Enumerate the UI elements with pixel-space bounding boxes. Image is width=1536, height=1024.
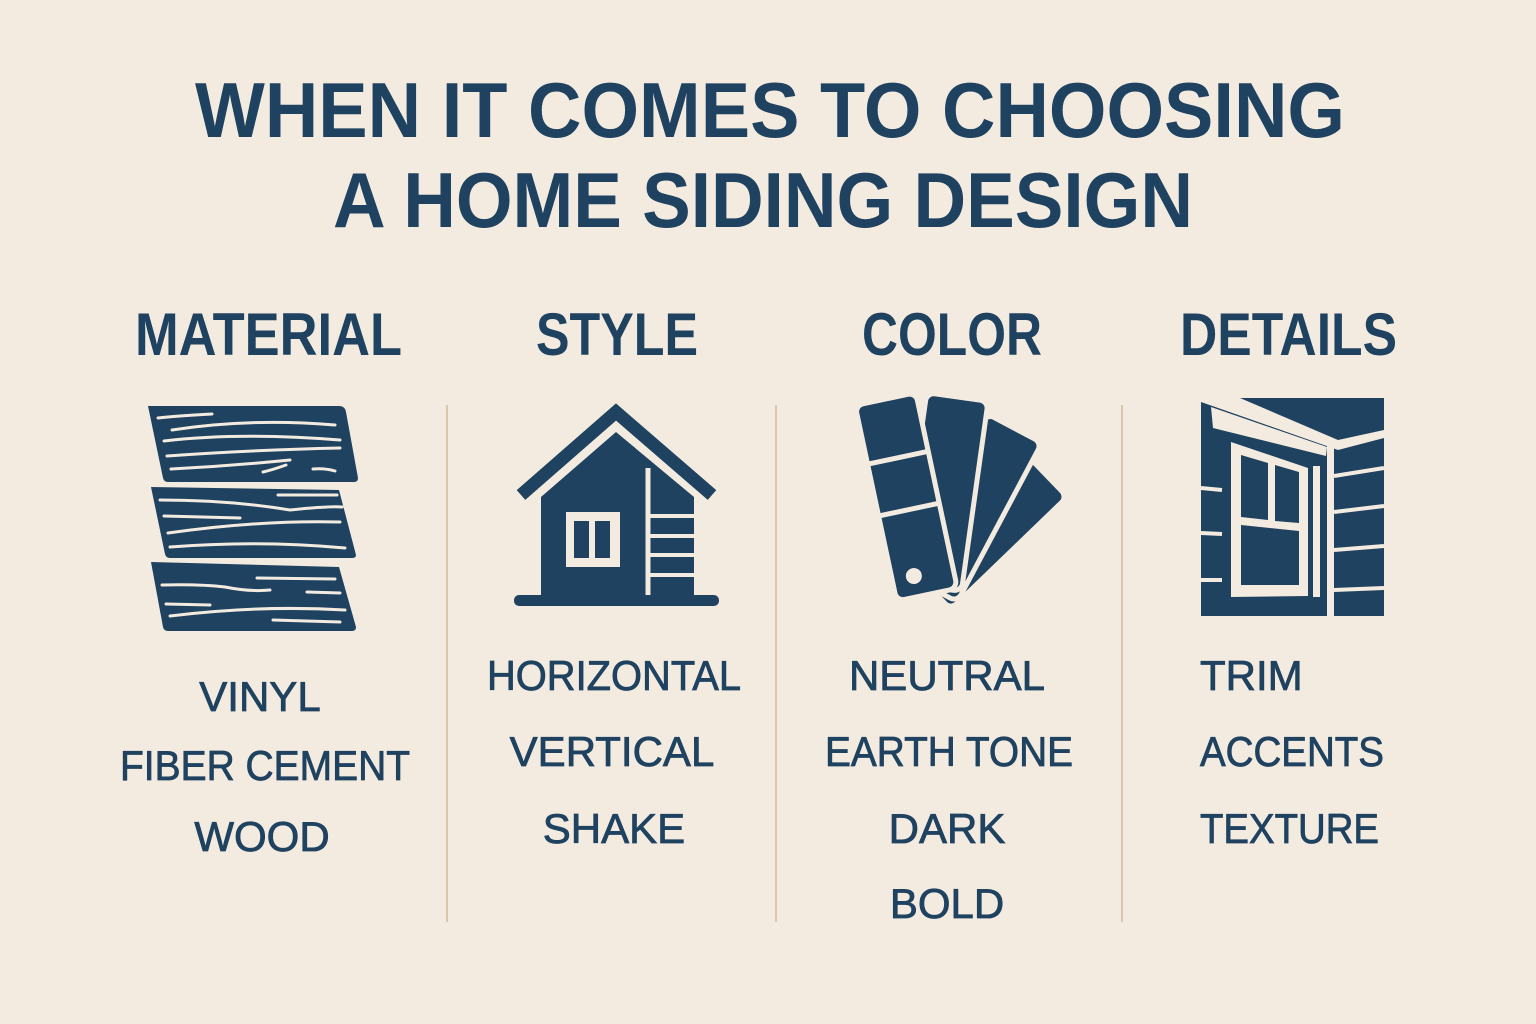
heading: details: DETAILS [1180,301,1397,368]
list: material [120,673,410,860]
heading: color: COLOR [862,301,1042,368]
icon: color swatch fan [855,393,1067,609]
list: material: VINYL [199,673,321,720]
heading: style: STYLE [536,301,698,368]
icon: house [514,412,719,606]
title: WHEN IT COMES TO CHOOSING [195,66,1345,154]
icon: window trim [1201,398,1384,616]
list: material: FIBER CEMENT [120,742,410,789]
list: color: DARK [889,805,1005,852]
list: details: ACCENTS [1200,728,1384,775]
panel: details [1180,301,1397,852]
panel: material [120,301,410,860]
list: style [487,652,741,852]
list: style: SHAKE [543,805,685,852]
list: color: BOLD [890,880,1004,927]
panel: color [825,301,1073,927]
list: style: HORIZONTAL [487,652,741,699]
list: color [825,652,1073,927]
icon: wood planks [148,406,358,631]
heading: material: MATERIAL [135,301,402,368]
list: style: VERTICAL [510,728,714,775]
list: material: WOOD [194,813,330,860]
title [195,66,1345,244]
list: color: NEUTRAL [849,652,1045,699]
list: details [1200,652,1384,852]
title: A HOME SIDING DESIGN [333,156,1193,244]
panel: style [487,301,741,852]
list: color: EARTH TONE [825,728,1073,775]
list: details: TRIM [1200,652,1303,699]
list: details: TEXTURE [1200,805,1379,852]
